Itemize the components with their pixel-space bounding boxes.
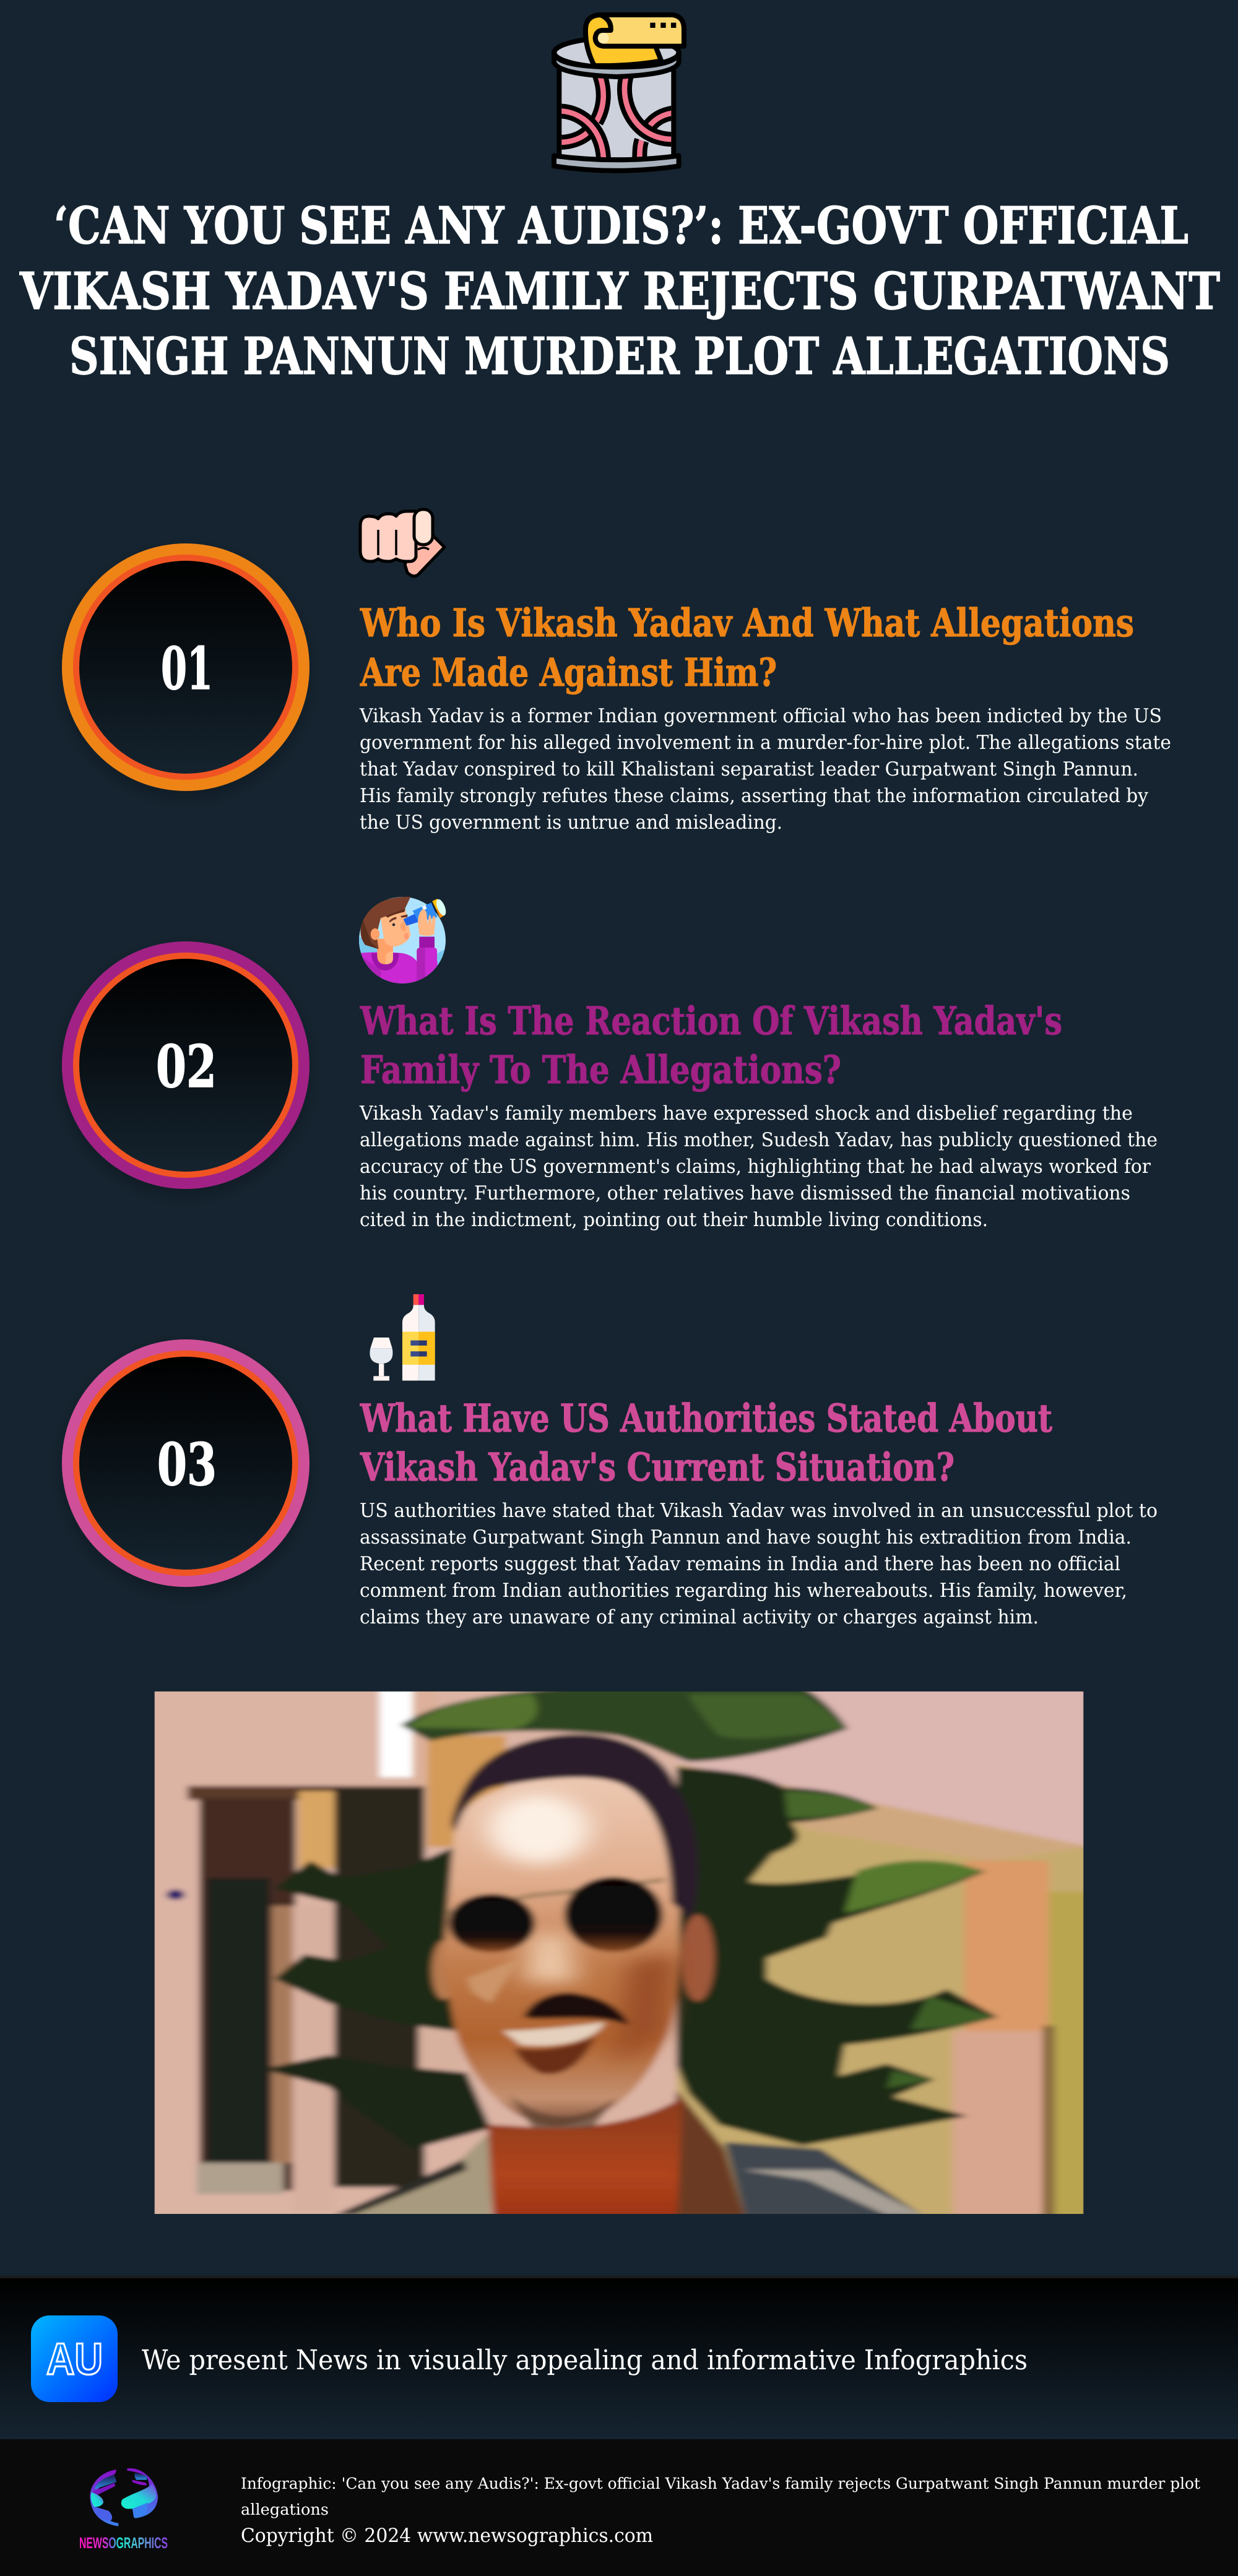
footer text: Copyright © 2024 www.newsographics.com bbox=[241, 2525, 653, 2547]
section 1 body text: government for his alleged involvement in a murder-for-hire plot. The allegations state bbox=[360, 732, 1171, 754]
title bbox=[19, 196, 1220, 386]
section 3 heading: What Have US Authorities Stated About bbox=[360, 1396, 1052, 1441]
section 2 heading: What Is The Reaction Of Vikash Yadav's bbox=[360, 998, 1062, 1044]
section 1 body text: Vikash Yadav is a former Indian government official who has been indicted by the US bbox=[359, 705, 1162, 727]
photo: man in sunglasses in front of a tree bbox=[155, 1691, 1083, 2214]
logo: Newsographics bbox=[79, 2468, 168, 2552]
tagline text: We present News in visually appealing and informative Infographics bbox=[142, 2345, 1028, 2376]
section 1 body text: His family strongly refutes these claims, asserting that the information circulated by bbox=[360, 785, 1148, 807]
section 1 heading bbox=[360, 600, 1134, 695]
neck and uniform bbox=[349, 2134, 498, 2214]
section 1 body text: that Yadav conspired to kill Khalistani separatist leader Gurpatwant Singh Pannun. bbox=[360, 758, 1138, 780]
section 3 body text: assassinate Gurpatwant Singh Pannun and have sought his extradition from India. bbox=[360, 1526, 1132, 1549]
badge: number 01 bbox=[62, 543, 310, 791]
icon: wine bottle and glass bbox=[370, 1294, 435, 1381]
icon: scroll in a tin can bbox=[554, 15, 684, 171]
section 1 heading: Are Made Against Him? bbox=[360, 650, 777, 695]
footer text: Infographic: 'Can you see any Audis?': Ex-govt official Vikash Yadav's family rejects Gurpatwant Singh Pannun murder plot bbox=[241, 2474, 1200, 2492]
sunglasses bbox=[449, 1880, 665, 1913]
section 3 body text bbox=[360, 1500, 1158, 1628]
section 3 heading bbox=[360, 1396, 1052, 1490]
footer text bbox=[241, 2474, 1200, 2547]
section 1 body text bbox=[359, 705, 1171, 834]
section 2 body text: allegations made against him. His mother, Sudesh Yadav, has publicly questioned the bbox=[360, 1129, 1158, 1151]
section 1 body text: the US government is untrue and misleading. bbox=[360, 811, 782, 834]
section 2 body text bbox=[359, 1102, 1158, 1231]
badge: number 02 bbox=[62, 941, 310, 1189]
section 2 body text: Vikash Yadav's family members have expressed shock and disbelief regarding the bbox=[359, 1102, 1133, 1125]
section 3 body text: Recent reports suggest that Yadav remains in India and there has been no official bbox=[360, 1553, 1120, 1575]
section 3 body text: comment from Indian authorities regarding his whereabouts. His family, however, bbox=[360, 1580, 1127, 1602]
head bbox=[681, 1914, 714, 2002]
section 2 body text: accuracy of the US government's claims, highlighting that he had always worked for bbox=[360, 1156, 1151, 1178]
section 3 body text: claims they are unaware of any criminal activity or charges against him. bbox=[360, 1606, 1039, 1628]
icon: AU app badge bbox=[31, 2315, 118, 2402]
tree mass bbox=[400, 1687, 847, 1761]
badge: number 01: 01 bbox=[161, 635, 213, 703]
badge: number 03: 03 bbox=[157, 1431, 217, 1499]
footer text: allegations bbox=[241, 2500, 329, 2518]
badge: number 03 bbox=[62, 1339, 310, 1587]
tagline band bbox=[0, 2278, 1238, 2439]
section 2 heading bbox=[360, 998, 1062, 1092]
icon: AU app badge: AU bbox=[46, 2335, 103, 2384]
badge: number 02: 02 bbox=[156, 1033, 217, 1101]
icon: fist bbox=[360, 509, 444, 576]
section 2 body text: his country. Furthermore, other relatives have dismissed the financial motivations bbox=[360, 1182, 1130, 1204]
icon: person with binoculars bbox=[359, 897, 448, 984]
section 3 body text: US authorities have stated that Vikash Yadav was involved in an unsuccessful plot to bbox=[360, 1500, 1158, 1522]
section 3 heading: Vikash Yadav's Current Situation? bbox=[360, 1445, 954, 1490]
mouth bbox=[524, 1993, 629, 2026]
section 2 heading: Family To The Allegations? bbox=[360, 1047, 841, 1092]
section 2 body text: cited in the indictment, pointing out their humble living conditions. bbox=[360, 1209, 988, 1231]
tagline band divider bbox=[0, 2276, 1238, 2278]
logo: Newsographics: NEWSOGRAPHICS bbox=[79, 2535, 168, 2552]
footer background bbox=[0, 2439, 1238, 2576]
